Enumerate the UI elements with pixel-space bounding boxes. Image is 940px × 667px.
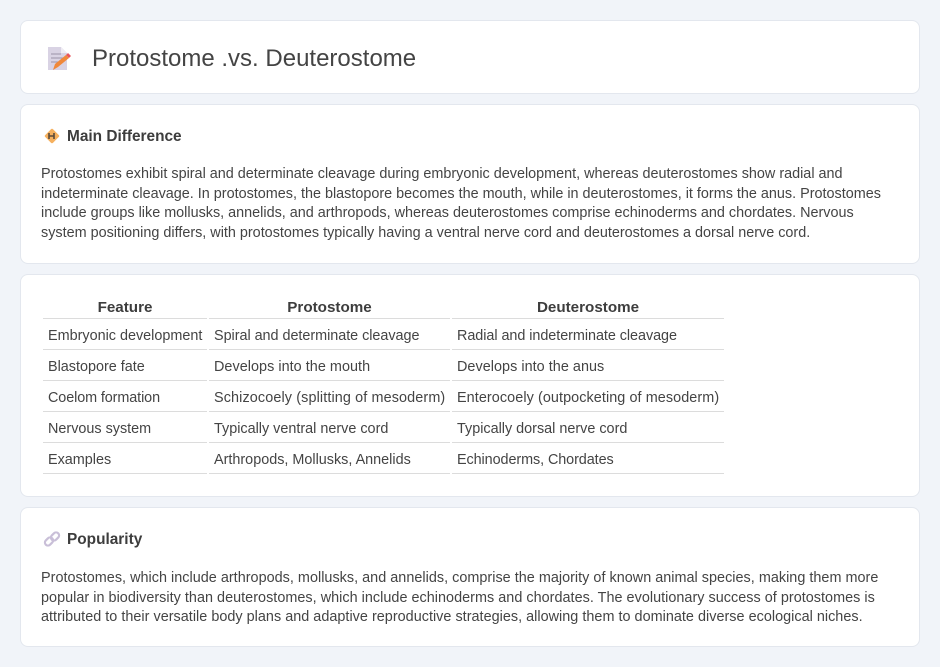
- text block: main difference: [41, 166, 881, 241]
- table row: examples: [48, 452, 614, 468]
- text block: popularity: attributed to their versatile body plans and adaptive reproductive strategies, allowing them to dominate diverse ecological niches.: [41, 609, 863, 625]
- table row: examples: Echinoderms, Chordates: [457, 452, 614, 468]
- icon: chain link: [44, 531, 60, 547]
- panel: title: [20, 20, 920, 94]
- table row: embryonic development: [48, 328, 677, 344]
- text block: popularity: Protostomes, which include arthropods, mollusks, and annelids, comprise the majority of known animal species, making them more: [41, 570, 878, 586]
- table header: Feature: [98, 299, 152, 316]
- table row: nervous system: [48, 421, 627, 437]
- table row: blastopore fate: Develops into the anus: [457, 359, 604, 375]
- panel: popularity: [20, 507, 920, 647]
- icon: warning diamond: [44, 128, 60, 144]
- table row: nervous system: Typically dorsal nerve cord: [457, 421, 627, 437]
- table row: embryonic development: Embryonic development: [48, 328, 202, 344]
- text block: main difference: Protostomes exhibit spiral and determinate cleavage during embryonic development, whereas deuterostomes show radial and: [41, 166, 843, 182]
- table row: coelom formation: [48, 390, 719, 406]
- table header: Protostome: [287, 299, 372, 316]
- title: Protostome .vs. Deuterostome: [92, 45, 416, 72]
- table row: blastopore fate: Develops into the mouth: [214, 359, 370, 375]
- table row: coelom formation: Enterocoely (outpocketing of mesoderm): [457, 390, 719, 406]
- text block: popularity: popular in biodiversity than deuterostomes, which include echinoderms and chordates. The evolutionary success of protostomes is: [41, 590, 875, 606]
- panel: main difference: [20, 104, 920, 264]
- table row: blastopore fate: Blastopore fate: [48, 359, 145, 375]
- table header: [98, 299, 639, 316]
- table row: examples: Examples: [48, 452, 111, 468]
- text block: main difference: system positioning differs, with protostomes typically having a ventral nerve cord and deuterostomes a dorsal nerve cord.: [41, 225, 810, 241]
- table row: nervous system: Nervous system: [48, 421, 151, 437]
- table row: embryonic development: Radial and indeterminate cleavage: [457, 328, 677, 344]
- table header: Deuterostome: [537, 299, 639, 316]
- table row: coelom formation: Schizocoely (splitting of mesoderm): [214, 390, 445, 406]
- table row: embryonic development: Spiral and determinate cleavage: [214, 328, 419, 344]
- table row: coelom formation: Coelom formation: [48, 390, 160, 406]
- heading: main difference: Main Difference: [67, 128, 182, 145]
- text block: popularity: [41, 570, 878, 625]
- icon: document with pencil: [48, 47, 71, 70]
- table row: examples: Arthropods, Mollusks, Annelids: [214, 452, 411, 468]
- table row: blastopore fate: [48, 359, 604, 375]
- table row: nervous system: Typically ventral nerve cord: [214, 421, 388, 437]
- text block: main difference: indeterminate cleavage. In protostomes, the blastopore becomes the mouth, while in deuterostomes, it forms the anus. Protostomes: [41, 186, 881, 202]
- text block: main difference: include groups like mollusks, annelids, and arthropods, whereas deuterostomes comprise echinoderms and chordates. Nervous: [41, 205, 854, 221]
- heading: popularity: Popularity: [67, 531, 142, 548]
- panel: comparison table: [20, 274, 920, 497]
